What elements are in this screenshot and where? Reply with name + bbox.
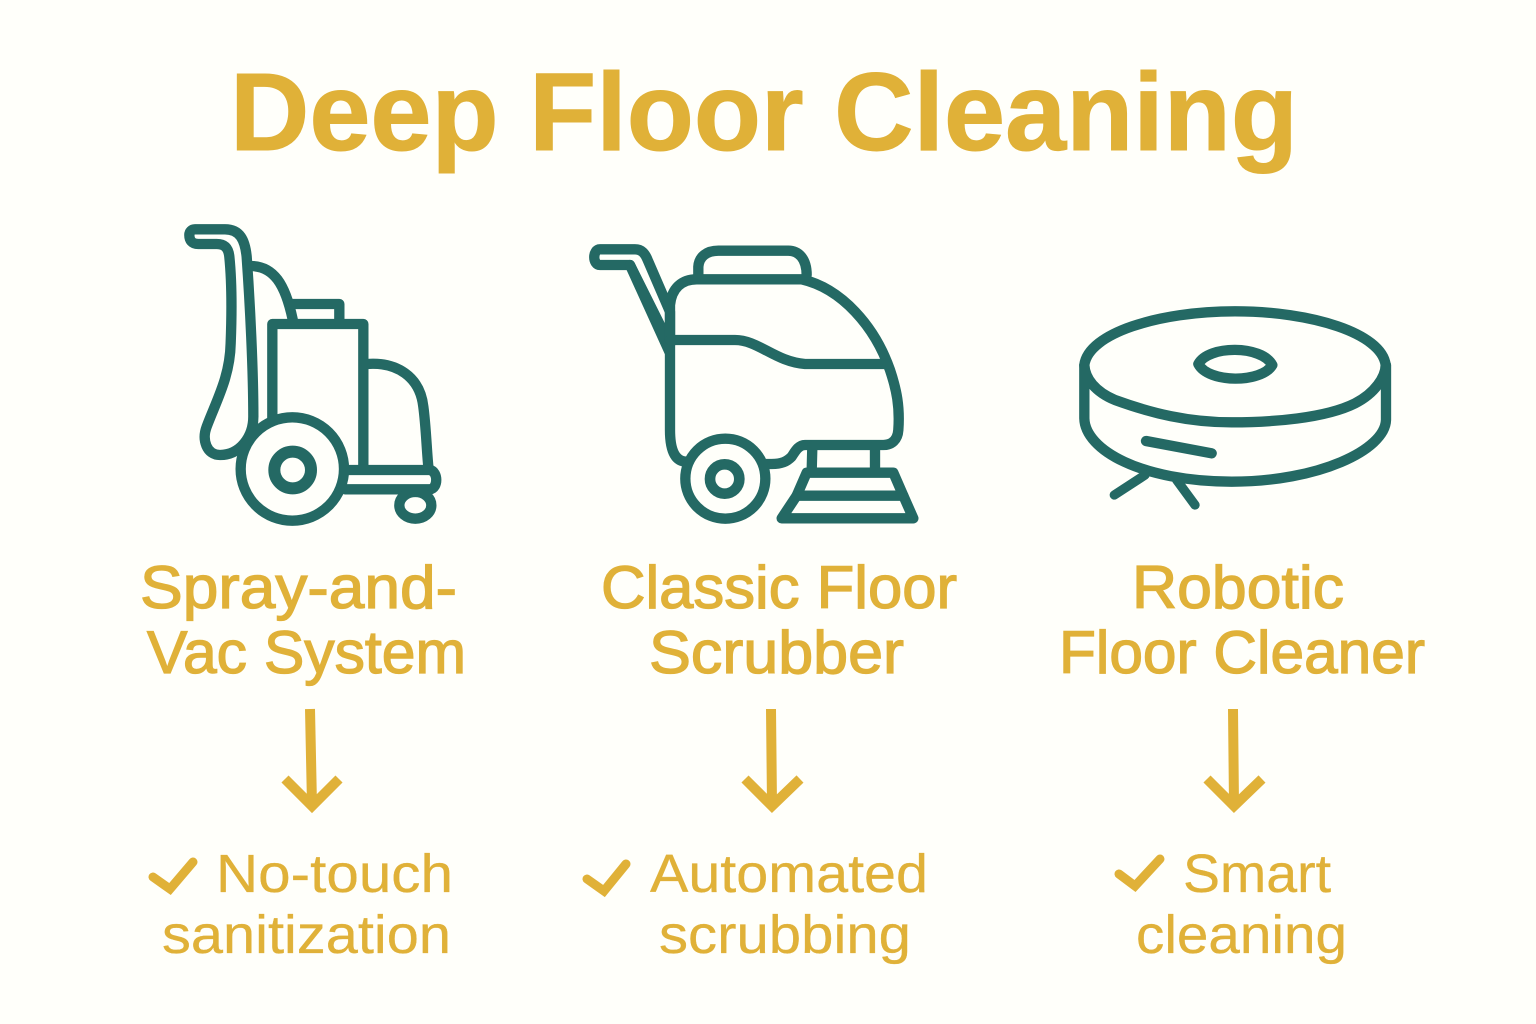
icon: spray-and-vac machine bbox=[189, 229, 436, 521]
benefit: automated scrubbing: scrubbing bbox=[659, 905, 911, 965]
heading: spray-and-vac system: Vac System bbox=[147, 619, 466, 686]
panel: classic floor scrubber bbox=[587, 249, 974, 965]
icon: check mark bbox=[153, 862, 193, 889]
heading: robotic floor cleaner: Robotic bbox=[1132, 554, 1344, 621]
panel: spray-and-vac system bbox=[140, 229, 474, 965]
icon: robot vacuum bbox=[1084, 311, 1386, 505]
icon: check mark bbox=[587, 864, 626, 891]
panel: robotic floor cleaner bbox=[1059, 311, 1425, 965]
arrow: down bbox=[285, 709, 339, 806]
arrow: down bbox=[745, 709, 800, 806]
benefit: automated scrubbing: Automated bbox=[650, 844, 928, 904]
benefit: no-touch sanitization: No-touch bbox=[216, 844, 453, 904]
benefit: smart cleaning: cleaning bbox=[1136, 905, 1347, 965]
benefit: smart cleaning: Smart bbox=[1183, 844, 1331, 904]
benefit: no-touch sanitization: sanitization bbox=[162, 905, 451, 965]
title: Deep Floor Cleaning bbox=[230, 51, 1298, 174]
icon: check mark bbox=[1119, 859, 1160, 886]
icon: floor scrubber machine bbox=[594, 249, 913, 519]
heading: robotic floor cleaner: Floor Cleaner bbox=[1059, 619, 1425, 686]
heading: classic floor scrubber: Scrubber bbox=[649, 619, 904, 686]
arrow: down bbox=[1207, 709, 1262, 806]
heading: spray-and-vac system: Spray-and- bbox=[140, 554, 457, 621]
heading: classic floor scrubber: Classic Floor bbox=[601, 554, 957, 621]
